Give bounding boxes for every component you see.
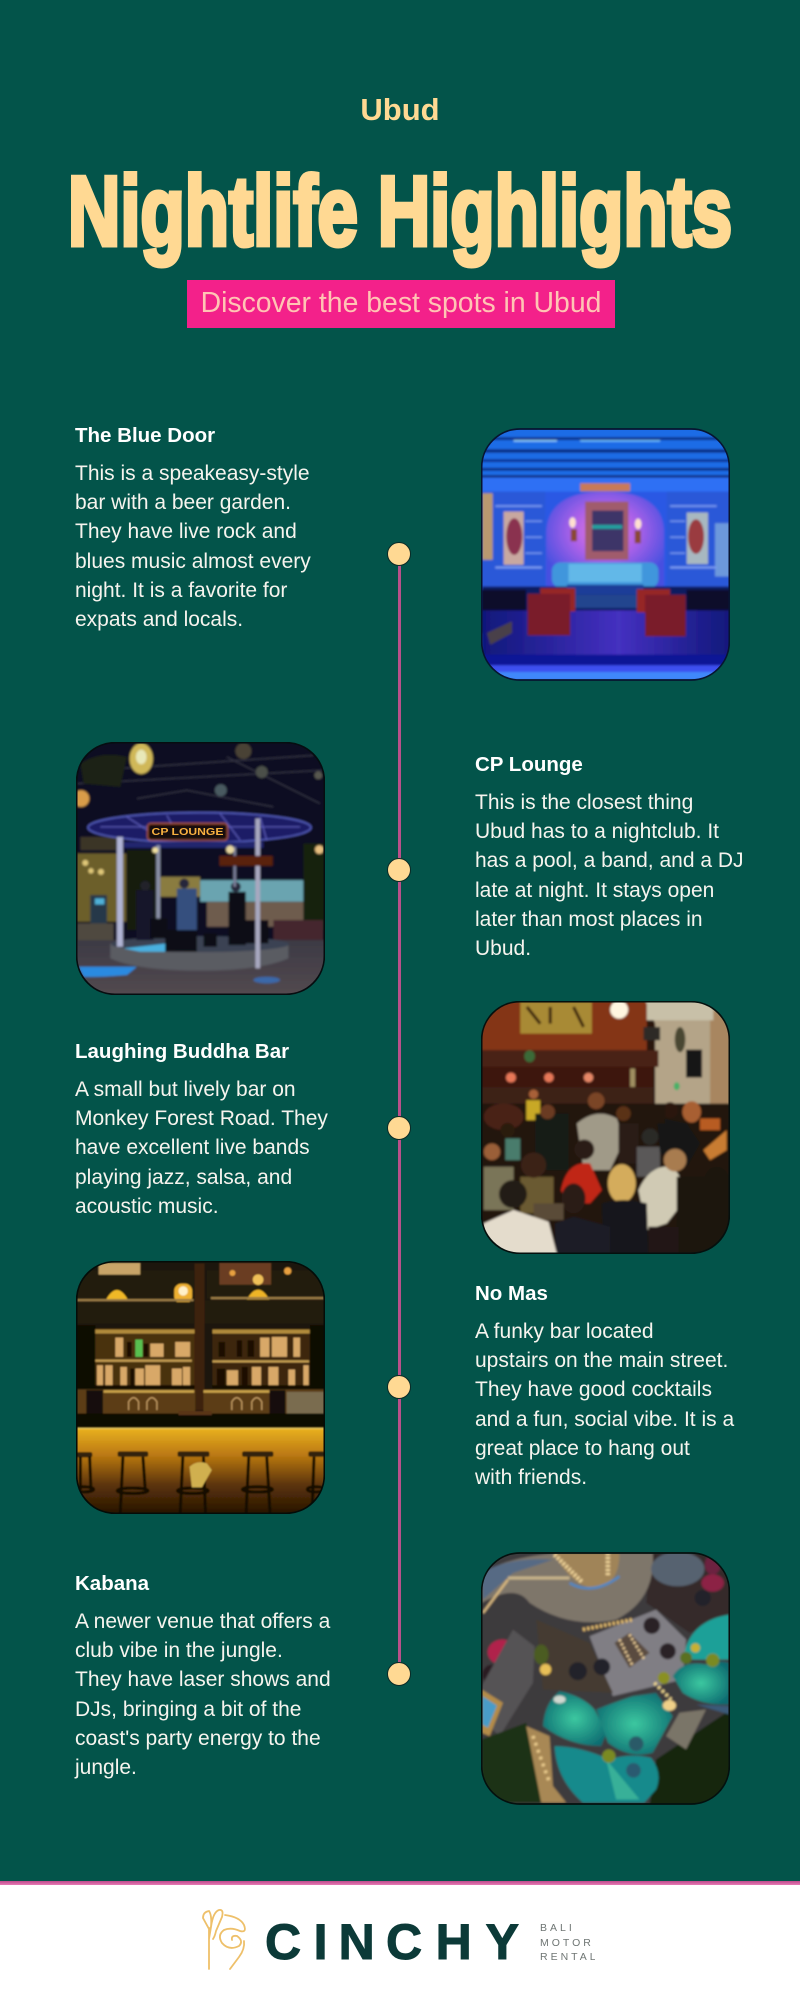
heading: CP Lounge — [475, 753, 583, 776]
photo: CP Lounge — [76, 742, 325, 995]
description: This is a speakeasy-style — [75, 462, 310, 485]
description: They have good cocktails — [475, 1378, 712, 1401]
description: has a pool, a band, and a DJ — [475, 849, 744, 872]
description: Monkey Forest Road. They — [75, 1107, 328, 1130]
subtitle: Ubud: Ubud — [360, 92, 440, 127]
timeline — [398, 566, 401, 1662]
description: expats and locals. — [75, 608, 243, 631]
heading: The Blue Door — [75, 424, 215, 447]
description: This is the closest thing — [475, 791, 693, 814]
description: upstairs on the main street. — [475, 1349, 728, 1372]
timeline dot 4 — [387, 1375, 411, 1399]
description: later than most places in — [475, 908, 703, 931]
description: club vibe in the jungle. — [75, 1639, 283, 1662]
description: DJs, bringing a bit of the — [75, 1698, 301, 1721]
panel: No Mas — [475, 1282, 734, 1489]
tagline banner — [187, 280, 615, 328]
tagline: Bali Motor Rental: MOTOR — [540, 1937, 594, 1949]
header — [68, 92, 732, 328]
description: They have live rock and — [75, 520, 297, 543]
description — [75, 462, 311, 631]
description: great place to hang out — [475, 1437, 690, 1460]
description: have excellent live bands — [75, 1136, 310, 1159]
description: bar with a beer garden. — [75, 491, 291, 514]
heading: Laughing Buddha Bar — [75, 1040, 289, 1063]
icon: hand — [203, 1910, 245, 1969]
description: playing jazz, salsa, and — [75, 1166, 292, 1189]
photo: CP Lounge: CP LOUNGE — [152, 827, 224, 838]
description: A funky bar located — [475, 1320, 654, 1343]
description: acoustic music. — [75, 1195, 219, 1218]
photo: Laughing Buddha Bar — [481, 1001, 730, 1254]
tagline: Bali Motor Rental: BALI — [540, 1922, 575, 1934]
wordmark: CINCHY: CINCHY — [265, 1914, 519, 1970]
photo: bar interior — [76, 1261, 325, 1514]
panel: CP Lounge — [475, 753, 744, 960]
photo: The Blue Door — [481, 428, 730, 681]
tagline banner: Discover the best spots in Ubud — [201, 287, 601, 319]
description: with friends. — [475, 1466, 587, 1489]
description — [475, 791, 744, 960]
logo — [202, 1909, 595, 1970]
tagline: Bali Motor Rental — [540, 1922, 599, 1963]
description — [75, 1078, 328, 1218]
description: A small but lively bar on — [75, 1078, 296, 1101]
description: late at night. It stays open — [475, 879, 714, 902]
description: They have laser shows and — [75, 1668, 331, 1691]
description: coast's party energy to the — [75, 1727, 321, 1750]
heading: Kabana — [75, 1572, 149, 1595]
photo: Kabana — [481, 1552, 730, 1805]
timeline dot 2 — [387, 858, 411, 882]
timeline dot 1 — [387, 542, 411, 566]
footer accent line — [0, 1881, 800, 1885]
footer — [0, 1881, 800, 2000]
panel: Laughing Buddha Bar — [75, 1040, 328, 1218]
description — [74, 1610, 331, 1779]
description: A newer venue that offers a — [75, 1610, 330, 1633]
description: and a fun, social vibe. It is a — [475, 1408, 734, 1431]
description: Ubud has to a nightclub. It — [475, 820, 719, 843]
description: night. It is a favorite for — [75, 579, 287, 602]
panel: Kabana — [74, 1572, 331, 1779]
description: blues music almost every — [75, 550, 311, 573]
description: jungle. — [75, 1756, 137, 1779]
description: Ubud. — [475, 937, 531, 960]
description — [475, 1320, 734, 1489]
timeline dot 5 — [387, 1662, 411, 1686]
timeline dot 3 — [387, 1116, 411, 1140]
timeline line — [398, 555, 401, 1675]
heading: No Mas — [475, 1282, 548, 1305]
panel: The Blue Door — [75, 424, 311, 631]
